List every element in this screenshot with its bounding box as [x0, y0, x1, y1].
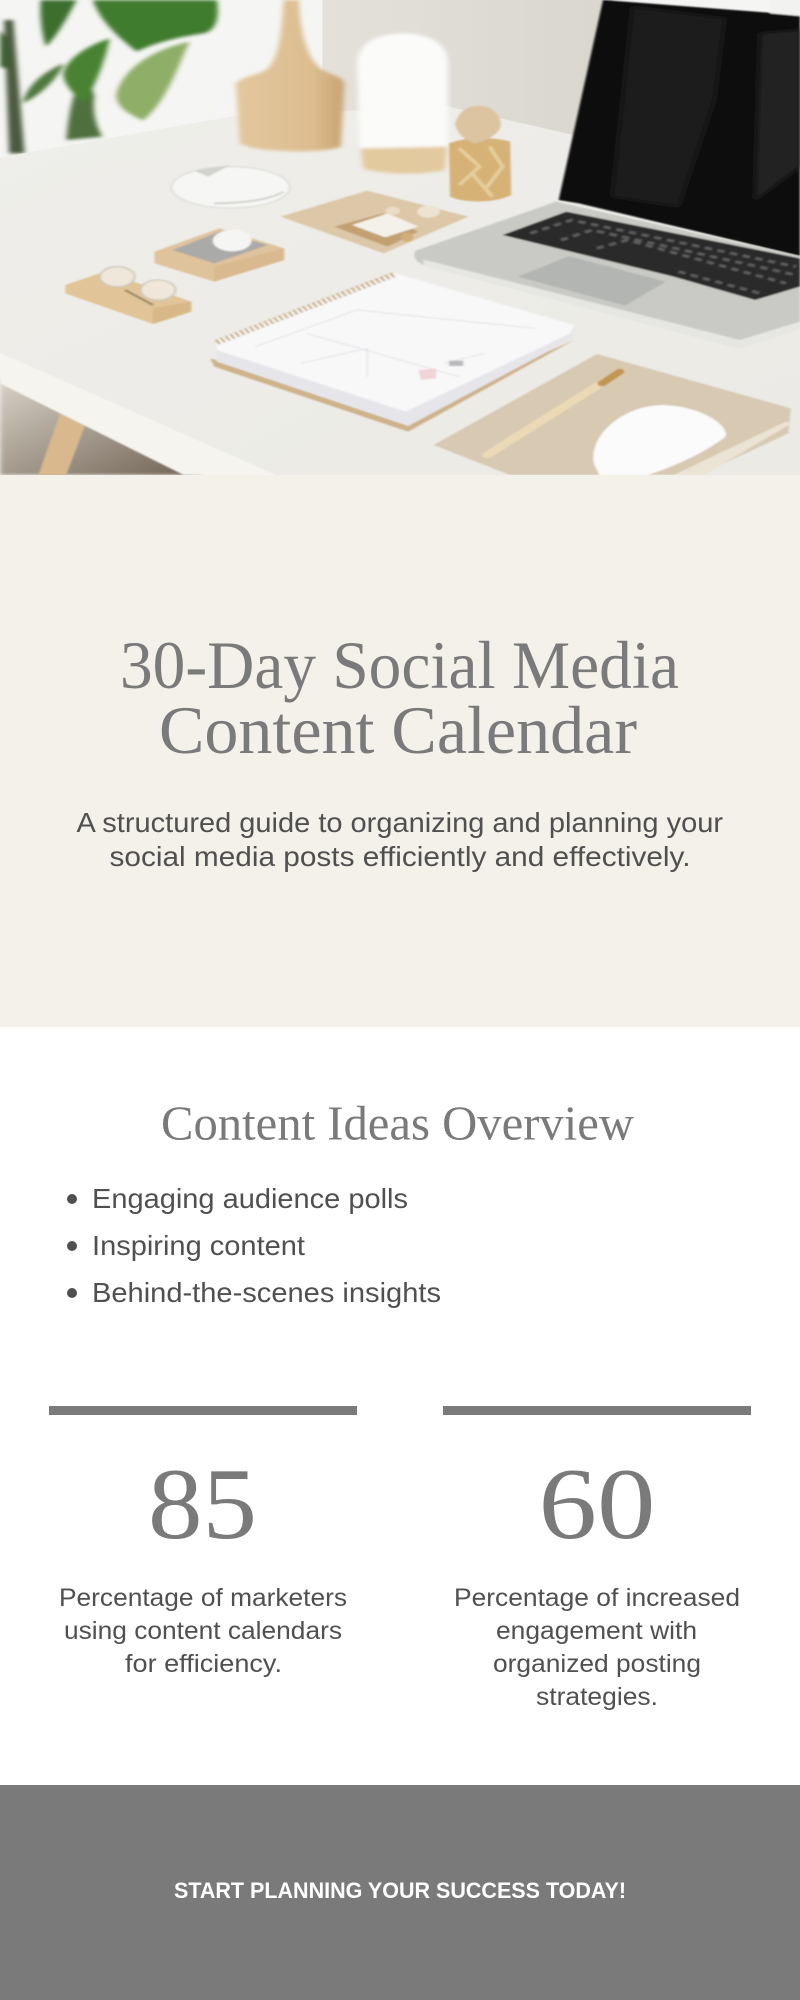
stat bar	[443, 1406, 751, 1415]
stat bar	[49, 1406, 357, 1415]
stat card: 85	[49, 1406, 357, 1678]
stat number: 60	[538, 1448, 656, 1561]
stat caption: engagement with	[496, 1617, 697, 1645]
hero photo: desk with planner and laptop	[0, 0, 800, 475]
title: 30-Day Social Media	[120, 627, 679, 703]
gold jar	[449, 106, 511, 201]
bullet list	[67, 1183, 441, 1308]
laptop	[414, 0, 800, 348]
stat caption	[454, 1584, 740, 1711]
wooden vase	[236, 0, 344, 151]
glass dish	[171, 165, 290, 208]
glasses on block	[65, 267, 191, 324]
stat caption: organized posting	[493, 1650, 701, 1678]
subtitle: social media posts efficiently and effectively.	[110, 841, 690, 872]
tan pad with pen and mouse	[434, 354, 792, 475]
section heading: content ideas: Content Ideas Overview	[161, 1096, 635, 1150]
wall	[322, 0, 613, 140]
white ribbed vase	[357, 33, 448, 174]
stat caption: Percentage of marketers	[59, 1584, 347, 1612]
stat card: 60	[443, 1406, 751, 1711]
stat caption	[59, 1584, 347, 1678]
under desk floor and leg	[0, 377, 204, 475]
hero panel background	[0, 475, 800, 1027]
tan tray	[281, 191, 468, 253]
list item: behind the scenes: Behind-the-scenes insights	[92, 1277, 441, 1308]
title	[120, 627, 679, 768]
list item: polls: Engaging audience polls	[92, 1183, 408, 1214]
wood box with tray	[155, 228, 284, 282]
stat caption: Percentage of increased	[454, 1584, 740, 1612]
title: Content Calendar	[159, 692, 637, 768]
stat caption: for efficiency.	[125, 1650, 282, 1678]
plant	[0, 0, 218, 153]
subtitle	[76, 807, 723, 872]
footer call to action: START PLANNING YOUR SUCCESS TODAY!	[174, 1878, 626, 1903]
stat caption: using content calendars	[64, 1617, 342, 1645]
planner notebook	[210, 273, 574, 432]
footer band	[0, 1785, 800, 2000]
list item: inspiring content: Inspiring content	[92, 1230, 305, 1261]
subtitle: A structured guide to organizing and planning your	[76, 807, 723, 838]
desk top	[0, 107, 800, 475]
stat number: 85	[148, 1448, 257, 1561]
desk front edge	[0, 378, 205, 475]
stat caption: strategies.	[536, 1683, 658, 1711]
